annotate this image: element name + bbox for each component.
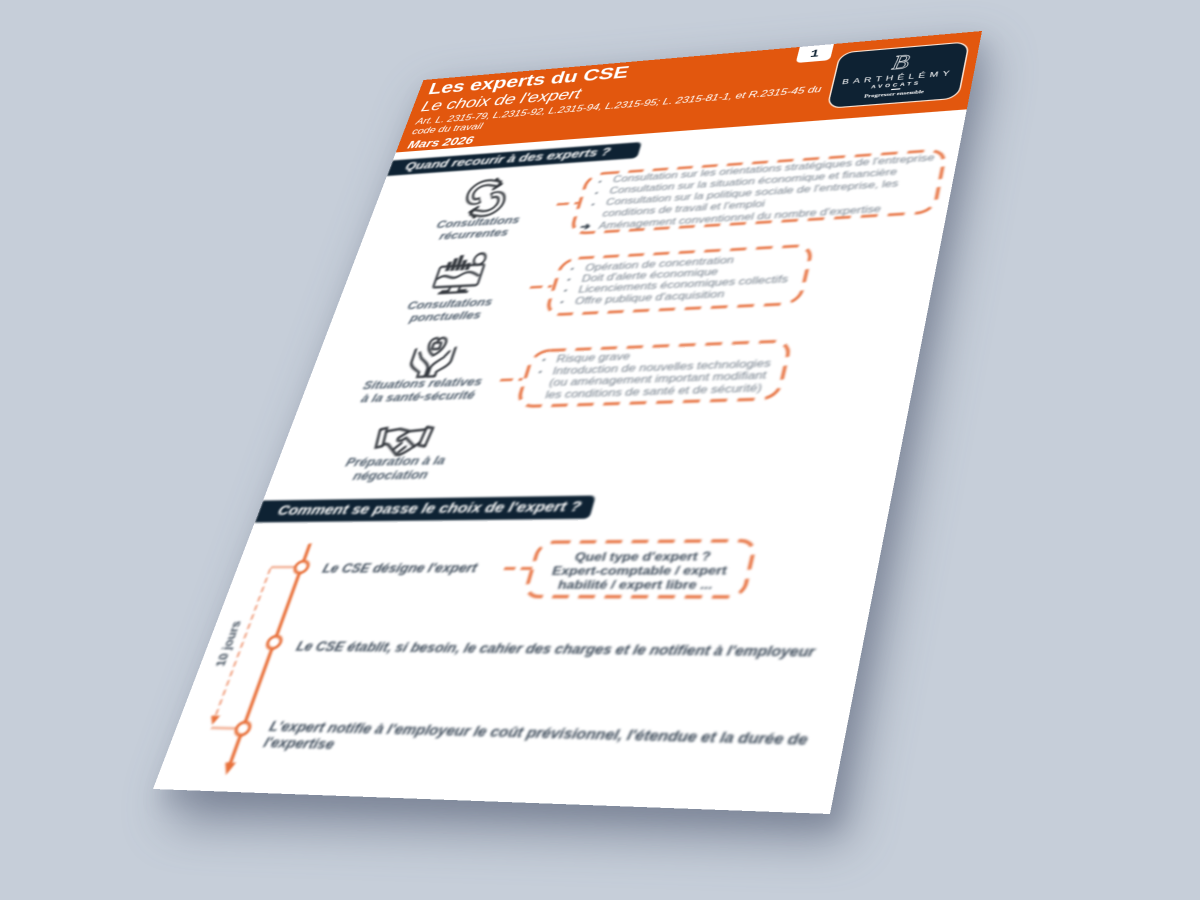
label: préparation à la négociation: négociation bbox=[351, 468, 430, 483]
panel: recurring consultations list: • bbox=[597, 178, 603, 186]
panel: type of expert: Expert-comptable / expert bbox=[550, 563, 729, 578]
icon: handshake bbox=[372, 424, 436, 458]
panel: punctual consultations list: Doit d'alerte économique bbox=[580, 266, 719, 284]
panel: health and safety list: • bbox=[537, 368, 543, 377]
panel: recurring consultations list: Consultation sur la situation économique et financière bbox=[608, 167, 898, 196]
step 1: Le CSE désigne l'expert bbox=[321, 561, 479, 575]
panel: recurring consultations list: ➔ bbox=[579, 221, 592, 232]
document page bbox=[153, 31, 982, 814]
connector 4 bbox=[502, 566, 534, 572]
connector 2 bbox=[528, 284, 554, 290]
label: consultations ponctuelles: ponctuelles bbox=[408, 309, 483, 324]
step 3: L'expert notifie à l'employeur le coût prévisionnel, l'étendue et la durée de bbox=[267, 719, 809, 748]
heading: quand recourir: Quand recourir à des experts ? bbox=[403, 146, 612, 173]
label: situations santé-sécurité bbox=[359, 375, 484, 405]
panel: health and safety list: (ou aménagement important modifiant bbox=[548, 370, 768, 389]
panel: recurring consultations list: conditions de travail et l'emploi bbox=[601, 198, 766, 219]
page number tab bbox=[796, 44, 834, 63]
heading: quand recourir bbox=[387, 142, 642, 176]
panel: recurring consultations list bbox=[570, 148, 947, 236]
panel: punctual consultations list: • bbox=[566, 276, 572, 285]
panel: health and safety list: Risque grave bbox=[555, 351, 632, 365]
label: consultations récurrentes: récurrentes bbox=[438, 226, 510, 242]
panel: punctual consultations list: Opération de concentration bbox=[584, 255, 735, 273]
panel: punctual consultations list: Offre publique d'acquisition bbox=[573, 288, 726, 307]
panel: recurring consultations list: Consultation sur la politique sociale de l'entreprise, les bbox=[605, 178, 899, 208]
label: consultations ponctuelles bbox=[406, 296, 494, 325]
panel: type of expert: Quel type d'expert ? bbox=[573, 549, 712, 564]
heading: comment se passe le choix bbox=[255, 495, 596, 523]
label: préparation à la négociation: Préparation à la bbox=[344, 454, 447, 469]
panel: punctual consultations list: • bbox=[559, 298, 565, 307]
icon: recurring consultations bbox=[464, 176, 508, 220]
logo: B bbox=[890, 50, 912, 74]
icon: health and safety hands bbox=[408, 335, 458, 380]
panel: punctual consultations list: Licenciements économiques collectifs bbox=[577, 274, 789, 295]
panel: recurring consultations list: • bbox=[594, 189, 599, 198]
label: situations santé-sécurité: à la santé-sécurité bbox=[359, 388, 477, 405]
step 2: Le CSE établit, si besoin, le cahier des charges et le notifient à l'employeur bbox=[294, 639, 816, 660]
header band bbox=[396, 31, 982, 152]
page number tab: 1 bbox=[809, 48, 821, 61]
logo: BARTHÉLÉMY bbox=[841, 69, 955, 86]
subtitle: Le choix de l'expert bbox=[419, 85, 584, 115]
connector 1 bbox=[555, 200, 580, 207]
label: préparation à la négociation bbox=[344, 454, 447, 484]
duration label: 10 jours bbox=[213, 621, 244, 667]
label: consultations récurrentes: Consultations bbox=[435, 214, 521, 230]
panel: punctual consultations list bbox=[546, 243, 814, 318]
heading: comment se passe le choix: Comment se passe le choix de l'expert ? bbox=[275, 498, 583, 518]
main content bbox=[209, 141, 947, 776]
panel: punctual consultations list: • bbox=[562, 287, 568, 296]
panel: recurring consultations list: • bbox=[590, 201, 596, 209]
logo: Progresser ensemble bbox=[864, 89, 925, 99]
panel: recurring consultations list: Aménagement conventionnel du nombre d'expertise bbox=[597, 204, 882, 231]
panel: health and safety list: • bbox=[541, 356, 547, 365]
label: situations santé-sécurité: Situations relatives bbox=[361, 375, 484, 392]
connector 3 bbox=[498, 376, 524, 383]
panel: punctual consultations list: • bbox=[569, 265, 575, 274]
panel: recurring consultations list: Consultation sur les orientations stratégiques de l'entreprise bbox=[612, 152, 936, 185]
legal references: code du travail bbox=[411, 121, 484, 136]
panel: health and safety list bbox=[516, 338, 792, 409]
panel: health and safety list: Introduction de nouvelles technologies bbox=[551, 357, 772, 377]
panel: type of expert bbox=[524, 537, 756, 600]
panel: type of expert: habilité / expert libre ... bbox=[556, 577, 715, 592]
timeline bbox=[209, 542, 313, 776]
logo: AVOCATS bbox=[871, 80, 922, 90]
label: consultations ponctuelles: Consultations bbox=[406, 296, 494, 312]
legal references: Art. L. 2315-79, L.2315-92, L.2315-94, L.2315-95; L. 2315-81-1, et R.2315-45 du bbox=[415, 84, 823, 127]
panel: health and safety list: les conditions de santé et de sécurité) bbox=[544, 382, 763, 401]
step 3: l'expertise bbox=[262, 735, 337, 752]
label: consultations récurrentes bbox=[435, 214, 521, 242]
logo bbox=[826, 41, 970, 109]
date: Mars 2026 bbox=[406, 134, 476, 151]
title: Les experts du CSE bbox=[426, 62, 631, 98]
icon: punctual consultations bbox=[430, 251, 488, 296]
